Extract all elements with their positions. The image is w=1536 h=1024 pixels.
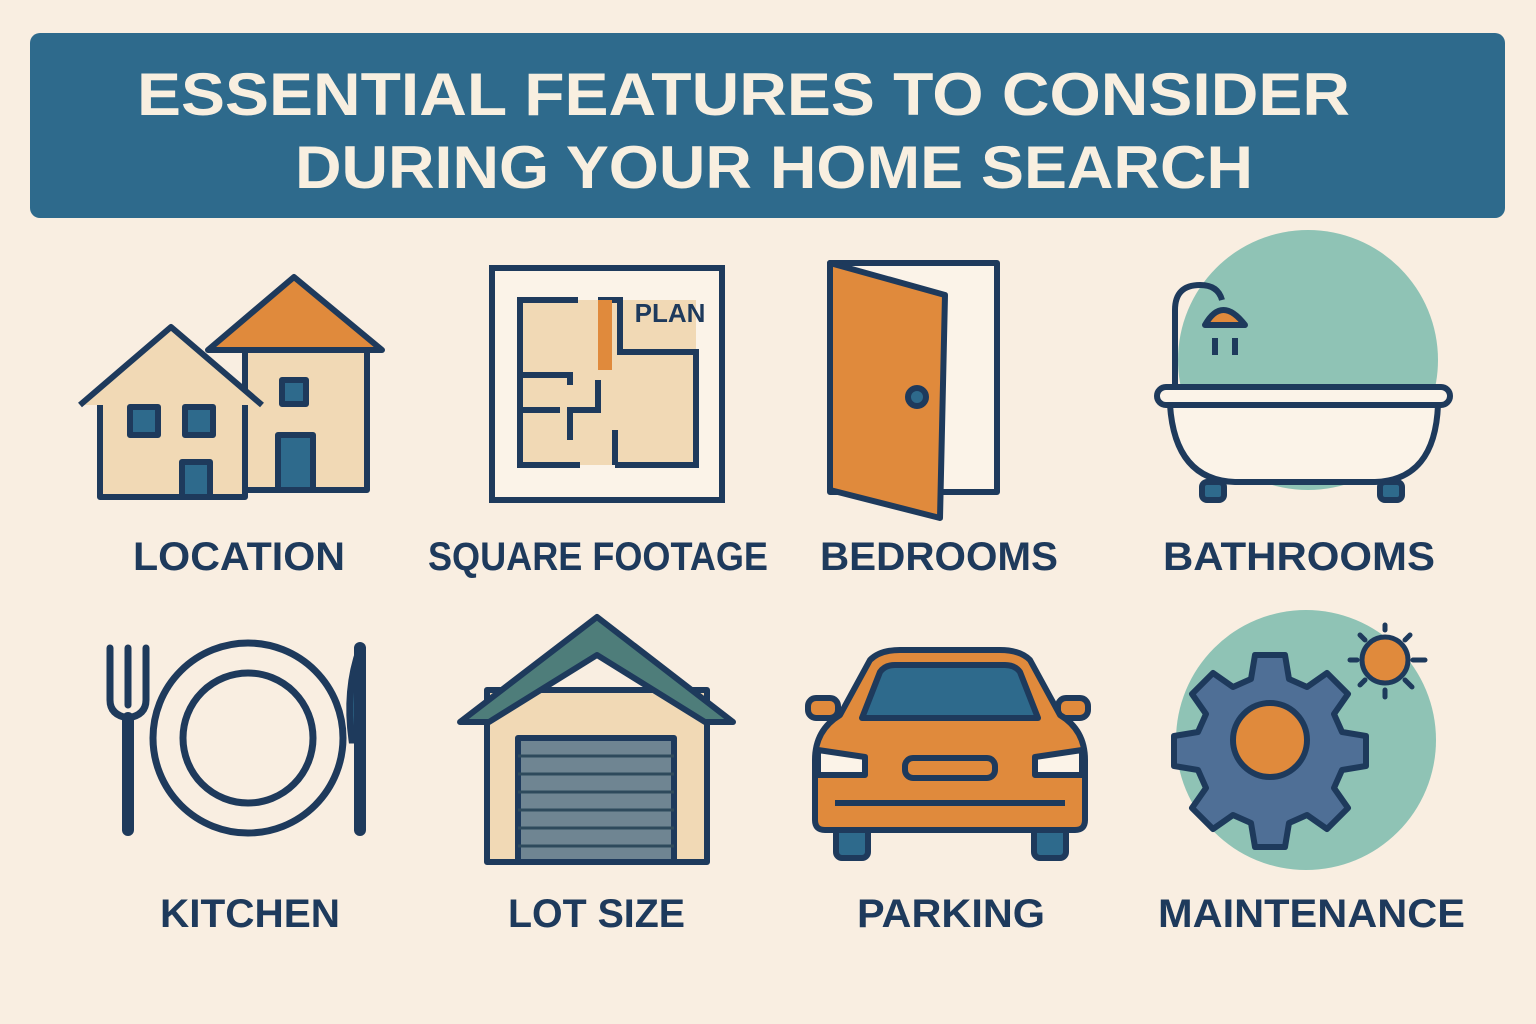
labels: BEDROOMS — [820, 535, 1058, 579]
title banner: ESSENTIAL FEATURES TO CONSIDER — [137, 61, 1350, 128]
labels: PARKING — [857, 892, 1045, 936]
icon: floor plan: PLAN — [635, 298, 705, 328]
title banner: DURING YOUR HOME SEARCH — [295, 134, 1253, 201]
labels: BATHROOMS — [1163, 535, 1435, 579]
icon: kitchen — [110, 643, 360, 833]
labels: KITCHEN — [160, 892, 340, 936]
icon: car — [808, 650, 1088, 858]
icon: maintenance gear — [1174, 610, 1436, 870]
icon: door — [830, 263, 997, 518]
labels: LOT SIZE — [508, 892, 685, 936]
labels: MAINTENANCE — [1158, 892, 1465, 936]
labels: SQUARE FOOTAGE — [428, 535, 768, 579]
icon: bathtub — [1157, 230, 1450, 500]
labels: LOCATION — [133, 535, 345, 579]
icon: garage — [460, 617, 733, 862]
icon: floor plan — [492, 268, 722, 500]
title banner — [30, 33, 1505, 218]
icon: location houses — [80, 277, 382, 497]
labels — [133, 535, 1465, 936]
